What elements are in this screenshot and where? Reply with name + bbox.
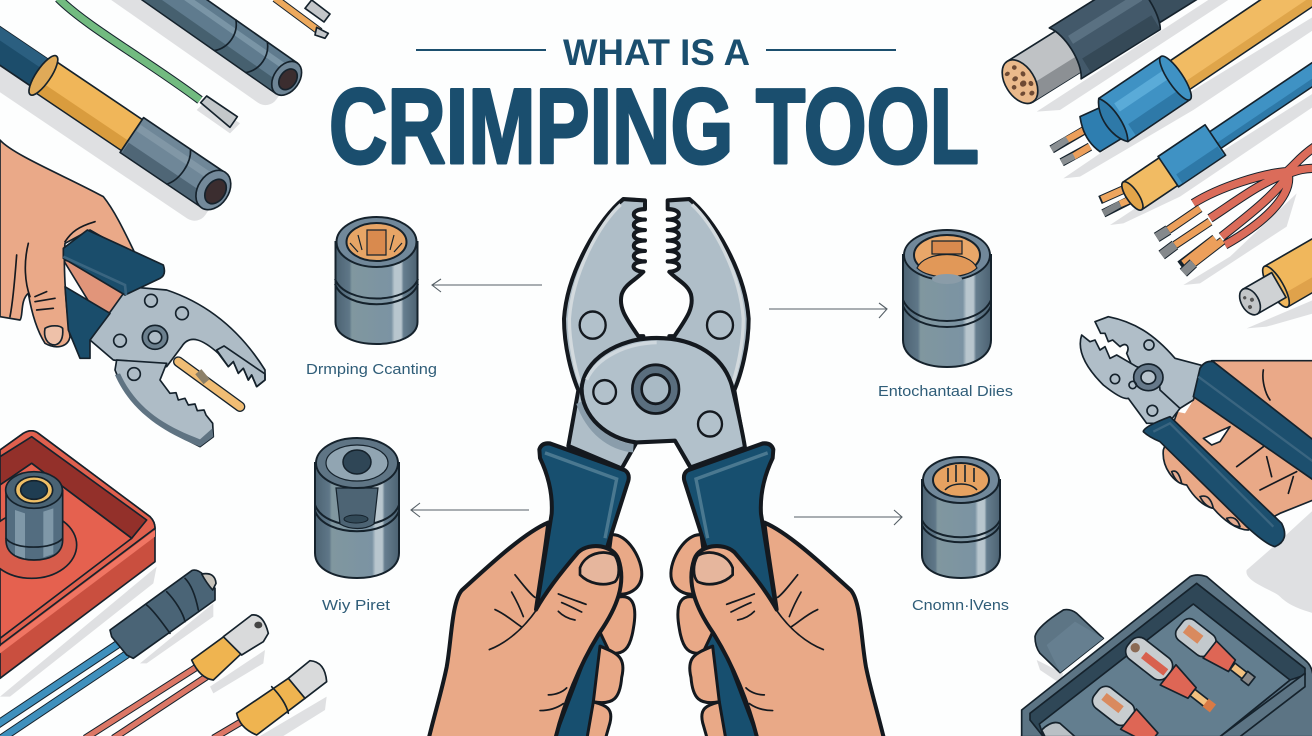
left jaw: [564, 199, 645, 469]
pin in left pliers: [178, 362, 240, 407]
label: bottom right: Cnomn·lVens: [912, 598, 1009, 614]
right pliers handles: [1143, 361, 1312, 547]
left hand: [428, 523, 642, 736]
center crimping tool held in two hands: [428, 199, 884, 736]
orange wire top: [275, 0, 330, 38]
cable: blue with yellow sleeve: [1100, 11, 1312, 214]
red terminal box: [0, 431, 155, 678]
blue wires and dark connector: [0, 570, 216, 736]
palm and thumb left: [428, 523, 621, 736]
plate rim shade: [587, 343, 657, 380]
shadow under right hand: [1246, 510, 1312, 613]
shadows: [1037, 0, 1312, 328]
right jaw: [668, 199, 749, 469]
right pliers head: [1080, 317, 1207, 423]
title small: WHAT IS A: [563, 32, 750, 73]
fingers right: [671, 535, 726, 736]
pivot shadow: [580, 402, 633, 448]
shadow of cables: [0, 0, 287, 226]
label: bottom left: Wiy Piret: [322, 598, 390, 614]
left lower grip: [553, 622, 608, 736]
arrow: bottom left: [411, 503, 529, 517]
top right cables: [992, 0, 1312, 736]
hand on right pliers: [1163, 361, 1312, 530]
title large: CRIMPING TOOL: [329, 66, 979, 186]
tray connector 1: [1172, 615, 1260, 691]
jaw rivets: [580, 312, 733, 339]
right handle: [684, 443, 776, 608]
title line left: [416, 49, 546, 51]
arrow: top right: [769, 303, 887, 318]
arrow: bottom right: [794, 510, 902, 525]
palm and thumb right: [691, 523, 884, 736]
nail right: [694, 553, 733, 584]
die icon: top right: [903, 230, 991, 367]
fingers left: [587, 535, 642, 736]
pliers held in left hand: [90, 287, 265, 447]
die icon: bottom right: [922, 457, 1000, 578]
tray of connectors: [1020, 575, 1312, 736]
plate rivets: [593, 380, 722, 437]
tray connector 3: [1088, 683, 1162, 736]
title: [329, 32, 979, 186]
title line right: [766, 49, 896, 51]
top left cables and hand with pliers: [0, 0, 330, 447]
red wires and yellow connector: [85, 615, 268, 736]
green wire: [58, 0, 237, 127]
cable: dark jacket with copper strands: [992, 0, 1296, 115]
die icon: bottom left: [315, 438, 399, 578]
left pliers handles: [63, 230, 164, 358]
nail left: [580, 553, 619, 584]
red wire and yellow gray connector: [213, 661, 327, 736]
left handle: [537, 443, 629, 608]
tray connector 2: [1121, 633, 1221, 719]
creases right: [727, 575, 823, 711]
tray body: [1022, 575, 1312, 736]
creases left: [489, 575, 586, 711]
die icon: top left: [335, 217, 418, 344]
pivot: [632, 365, 679, 414]
cable: yellow with blue sleeve: [1052, 0, 1312, 162]
shadow: [0, 567, 327, 736]
right lower grip: [704, 622, 759, 736]
arrow: top left: [432, 279, 542, 292]
hand on pliers: [0, 140, 140, 347]
red wire bundle: [1157, 147, 1312, 273]
label: top right: Entochantaal Diies: [878, 384, 1013, 400]
bottom left box and cables: [0, 431, 327, 736]
cable: big yellow and gray tube: [0, 3, 239, 218]
jaw highlights: [569, 205, 743, 383]
right hand: [671, 523, 884, 736]
tray connector 4: [1042, 722, 1075, 736]
label: top left: Drmping Ccanting: [306, 362, 437, 378]
front plate: [582, 338, 745, 468]
cable: gray tube top: [85, 0, 308, 101]
connector: yellow and silver: [1231, 216, 1312, 326]
tray handle: [1035, 610, 1103, 673]
